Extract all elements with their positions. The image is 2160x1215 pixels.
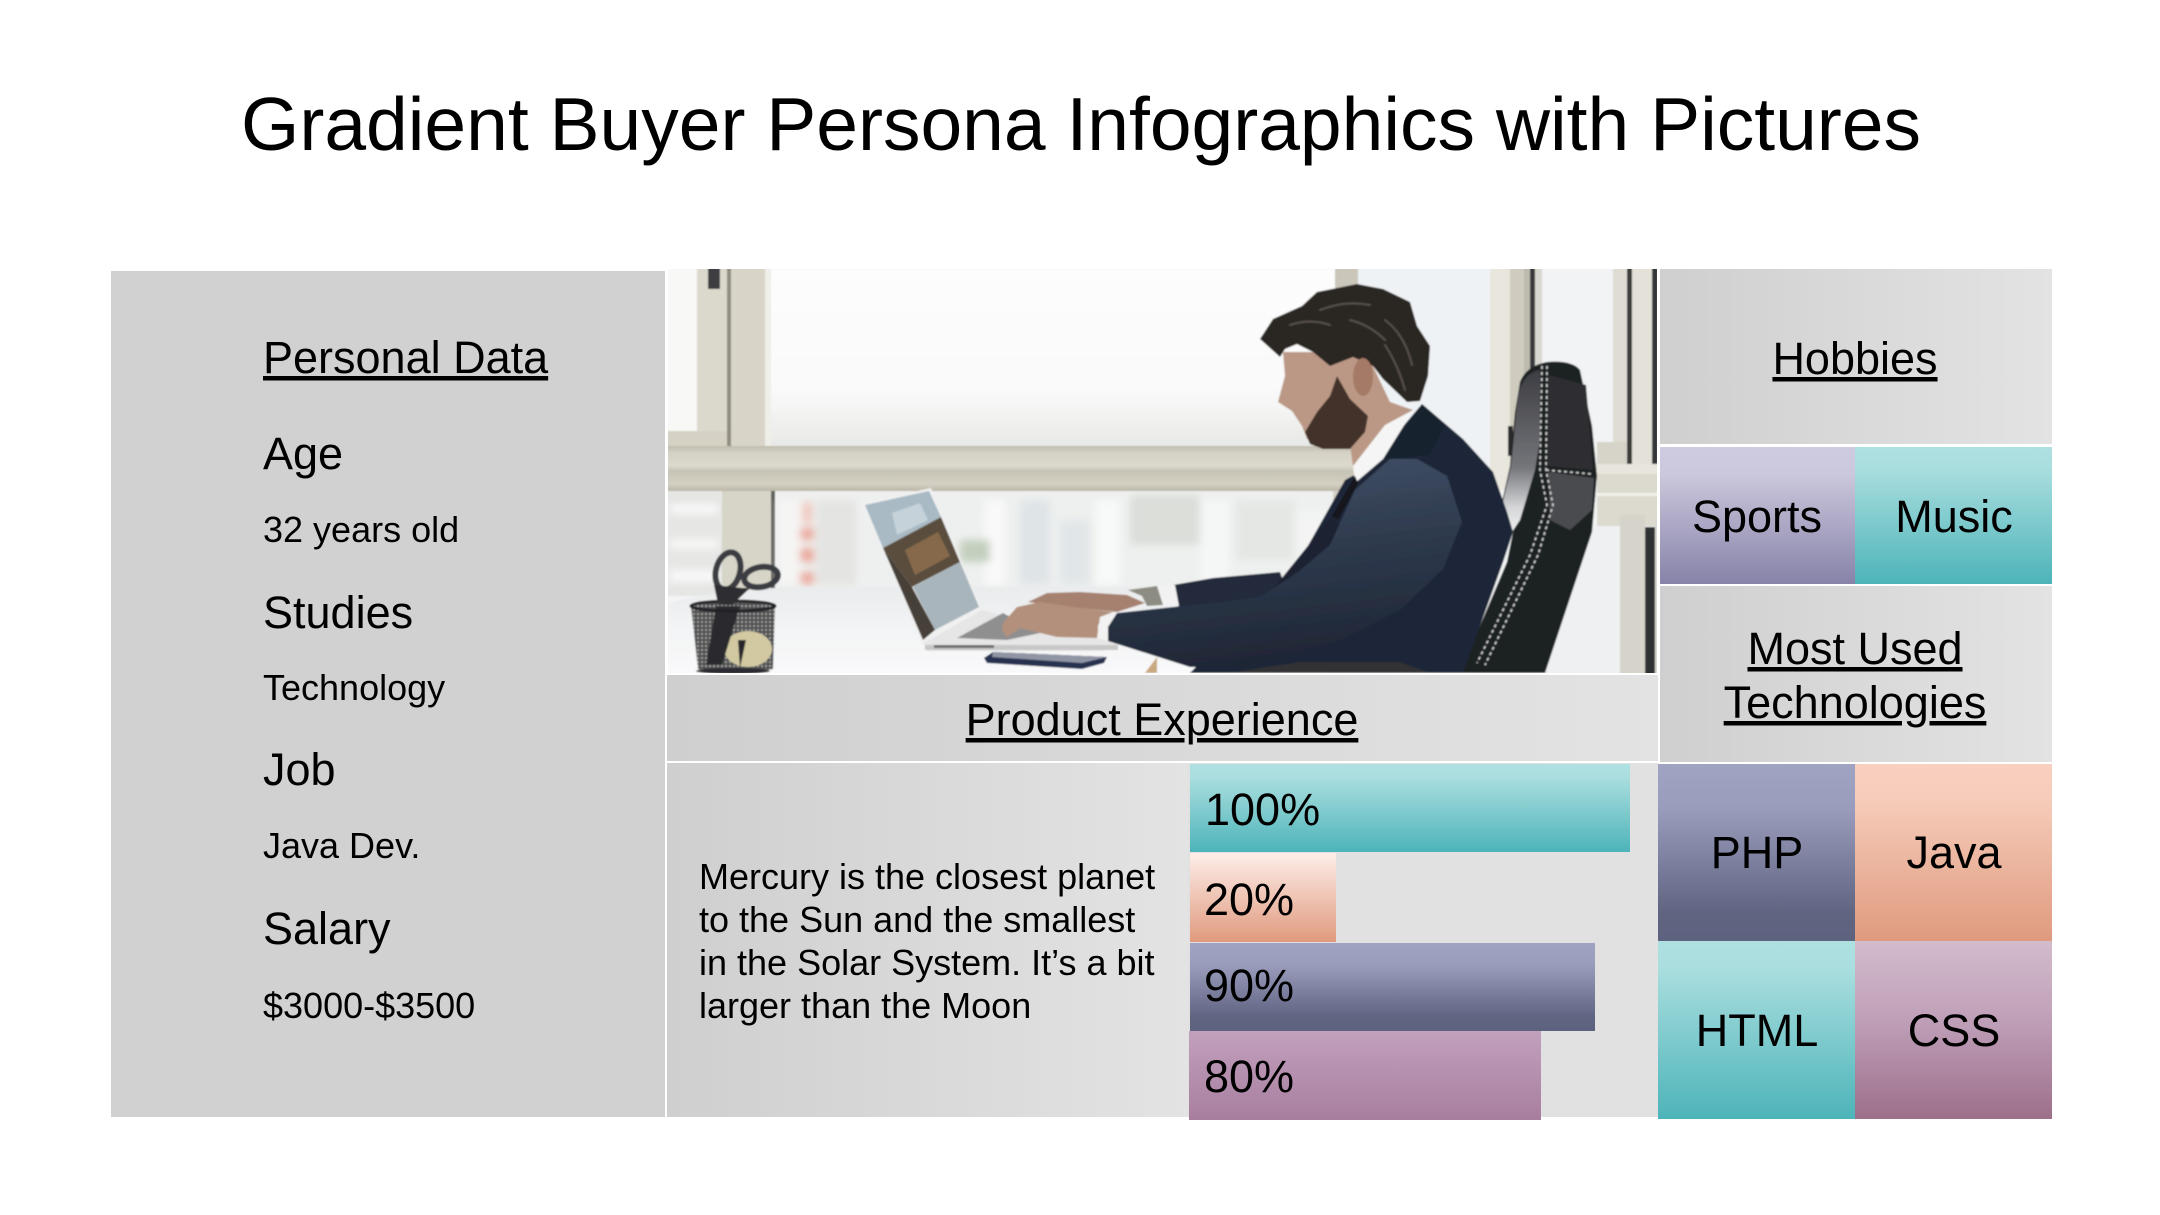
field: studies: [263, 587, 445, 708]
bar: 20%: 20%: [1204, 874, 1294, 925]
panel: product experience text: Mercury is the closest planet: [699, 856, 1155, 897]
panel: product experience text: in the Solar System. It’s a bit: [699, 942, 1155, 983]
laptop: [862, 488, 1118, 651]
heading: personal data: Personal Data: [263, 332, 549, 383]
ear: [1353, 358, 1373, 396]
field: age: 32 years old: [263, 509, 459, 550]
tile: CSS: CSS: [1908, 1005, 2000, 1056]
field: age: Age: [263, 428, 343, 479]
near arm: [1108, 459, 1462, 667]
table: [747, 586, 1128, 593]
field: salary: Salary: [263, 903, 391, 954]
hands: [1028, 592, 1145, 612]
tile: PHP: PHP: [1711, 827, 1803, 878]
panel: most used technologies heading: Technologies: [1724, 677, 1986, 728]
pen holder with scissors: [691, 550, 779, 674]
tile: PHP: [1658, 764, 1855, 941]
panel: product experience heading: [667, 675, 1658, 761]
chair arm: [1238, 662, 1426, 672]
far sleeve, cuff and watch: [1173, 572, 1290, 607]
tile: HTML: [1658, 941, 1855, 1119]
phone: [984, 652, 1107, 669]
field: salary: [263, 903, 475, 1026]
bar chart: product experience: [1188, 763, 1658, 1120]
tile: Java: Java: [1906, 827, 2002, 878]
panel: most used technologies heading: [1660, 586, 2052, 762]
title: Gradient Buyer Persona Infographics with Pictures: [241, 82, 1921, 166]
field: age: [263, 428, 459, 550]
panel: product experience text: larger than the Moon: [699, 985, 1031, 1026]
man: [1002, 284, 1513, 673]
neck and face: [1278, 352, 1413, 466]
bar: 100%: 100%: [1205, 784, 1320, 835]
hair: [1260, 284, 1430, 402]
panel: product experience text: [667, 763, 1188, 1117]
chair: [1460, 362, 1597, 673]
field: studies: Studies: [263, 587, 413, 638]
field: studies: Technology: [263, 667, 445, 708]
tile: HTML: HTML: [1696, 1005, 1818, 1056]
panel: product experience text: to the Sun and the smallest: [699, 899, 1135, 940]
bar: 20%: [1190, 853, 1336, 942]
field: job: Job: [263, 744, 336, 795]
shirt and tie: [1352, 424, 1406, 482]
field: job: Java Dev.: [263, 825, 420, 866]
bar: 80%: 80%: [1204, 1051, 1294, 1102]
tile: sports: [1660, 447, 1855, 584]
field: salary: $3000-$3500: [263, 985, 475, 1026]
picture: man working at a laptop by the window: [660, 260, 1670, 680]
beard: [1305, 376, 1368, 449]
bar: 100%: [1190, 764, 1630, 852]
panel: hobbies heading: Hobbies: [1772, 333, 1938, 384]
panel: product experience heading: Product Experience: [966, 694, 1358, 745]
tile: music: Music: [1895, 491, 2013, 542]
bar: 90%: [1190, 943, 1595, 1031]
panel: personal data: [111, 271, 665, 1117]
bar: 90%: 90%: [1204, 960, 1294, 1011]
torso: [1190, 404, 1513, 673]
tile: CSS: [1855, 941, 2052, 1119]
tile: music: [1855, 447, 2052, 584]
bar: 80%: [1189, 1031, 1541, 1120]
tile: Java: [1855, 764, 2052, 941]
tile: sports: Sports: [1692, 491, 1822, 542]
panel: hobbies heading: [1660, 269, 2052, 444]
field: job: [263, 744, 420, 866]
panel: most used technologies heading: Most Used: [1747, 623, 1963, 674]
